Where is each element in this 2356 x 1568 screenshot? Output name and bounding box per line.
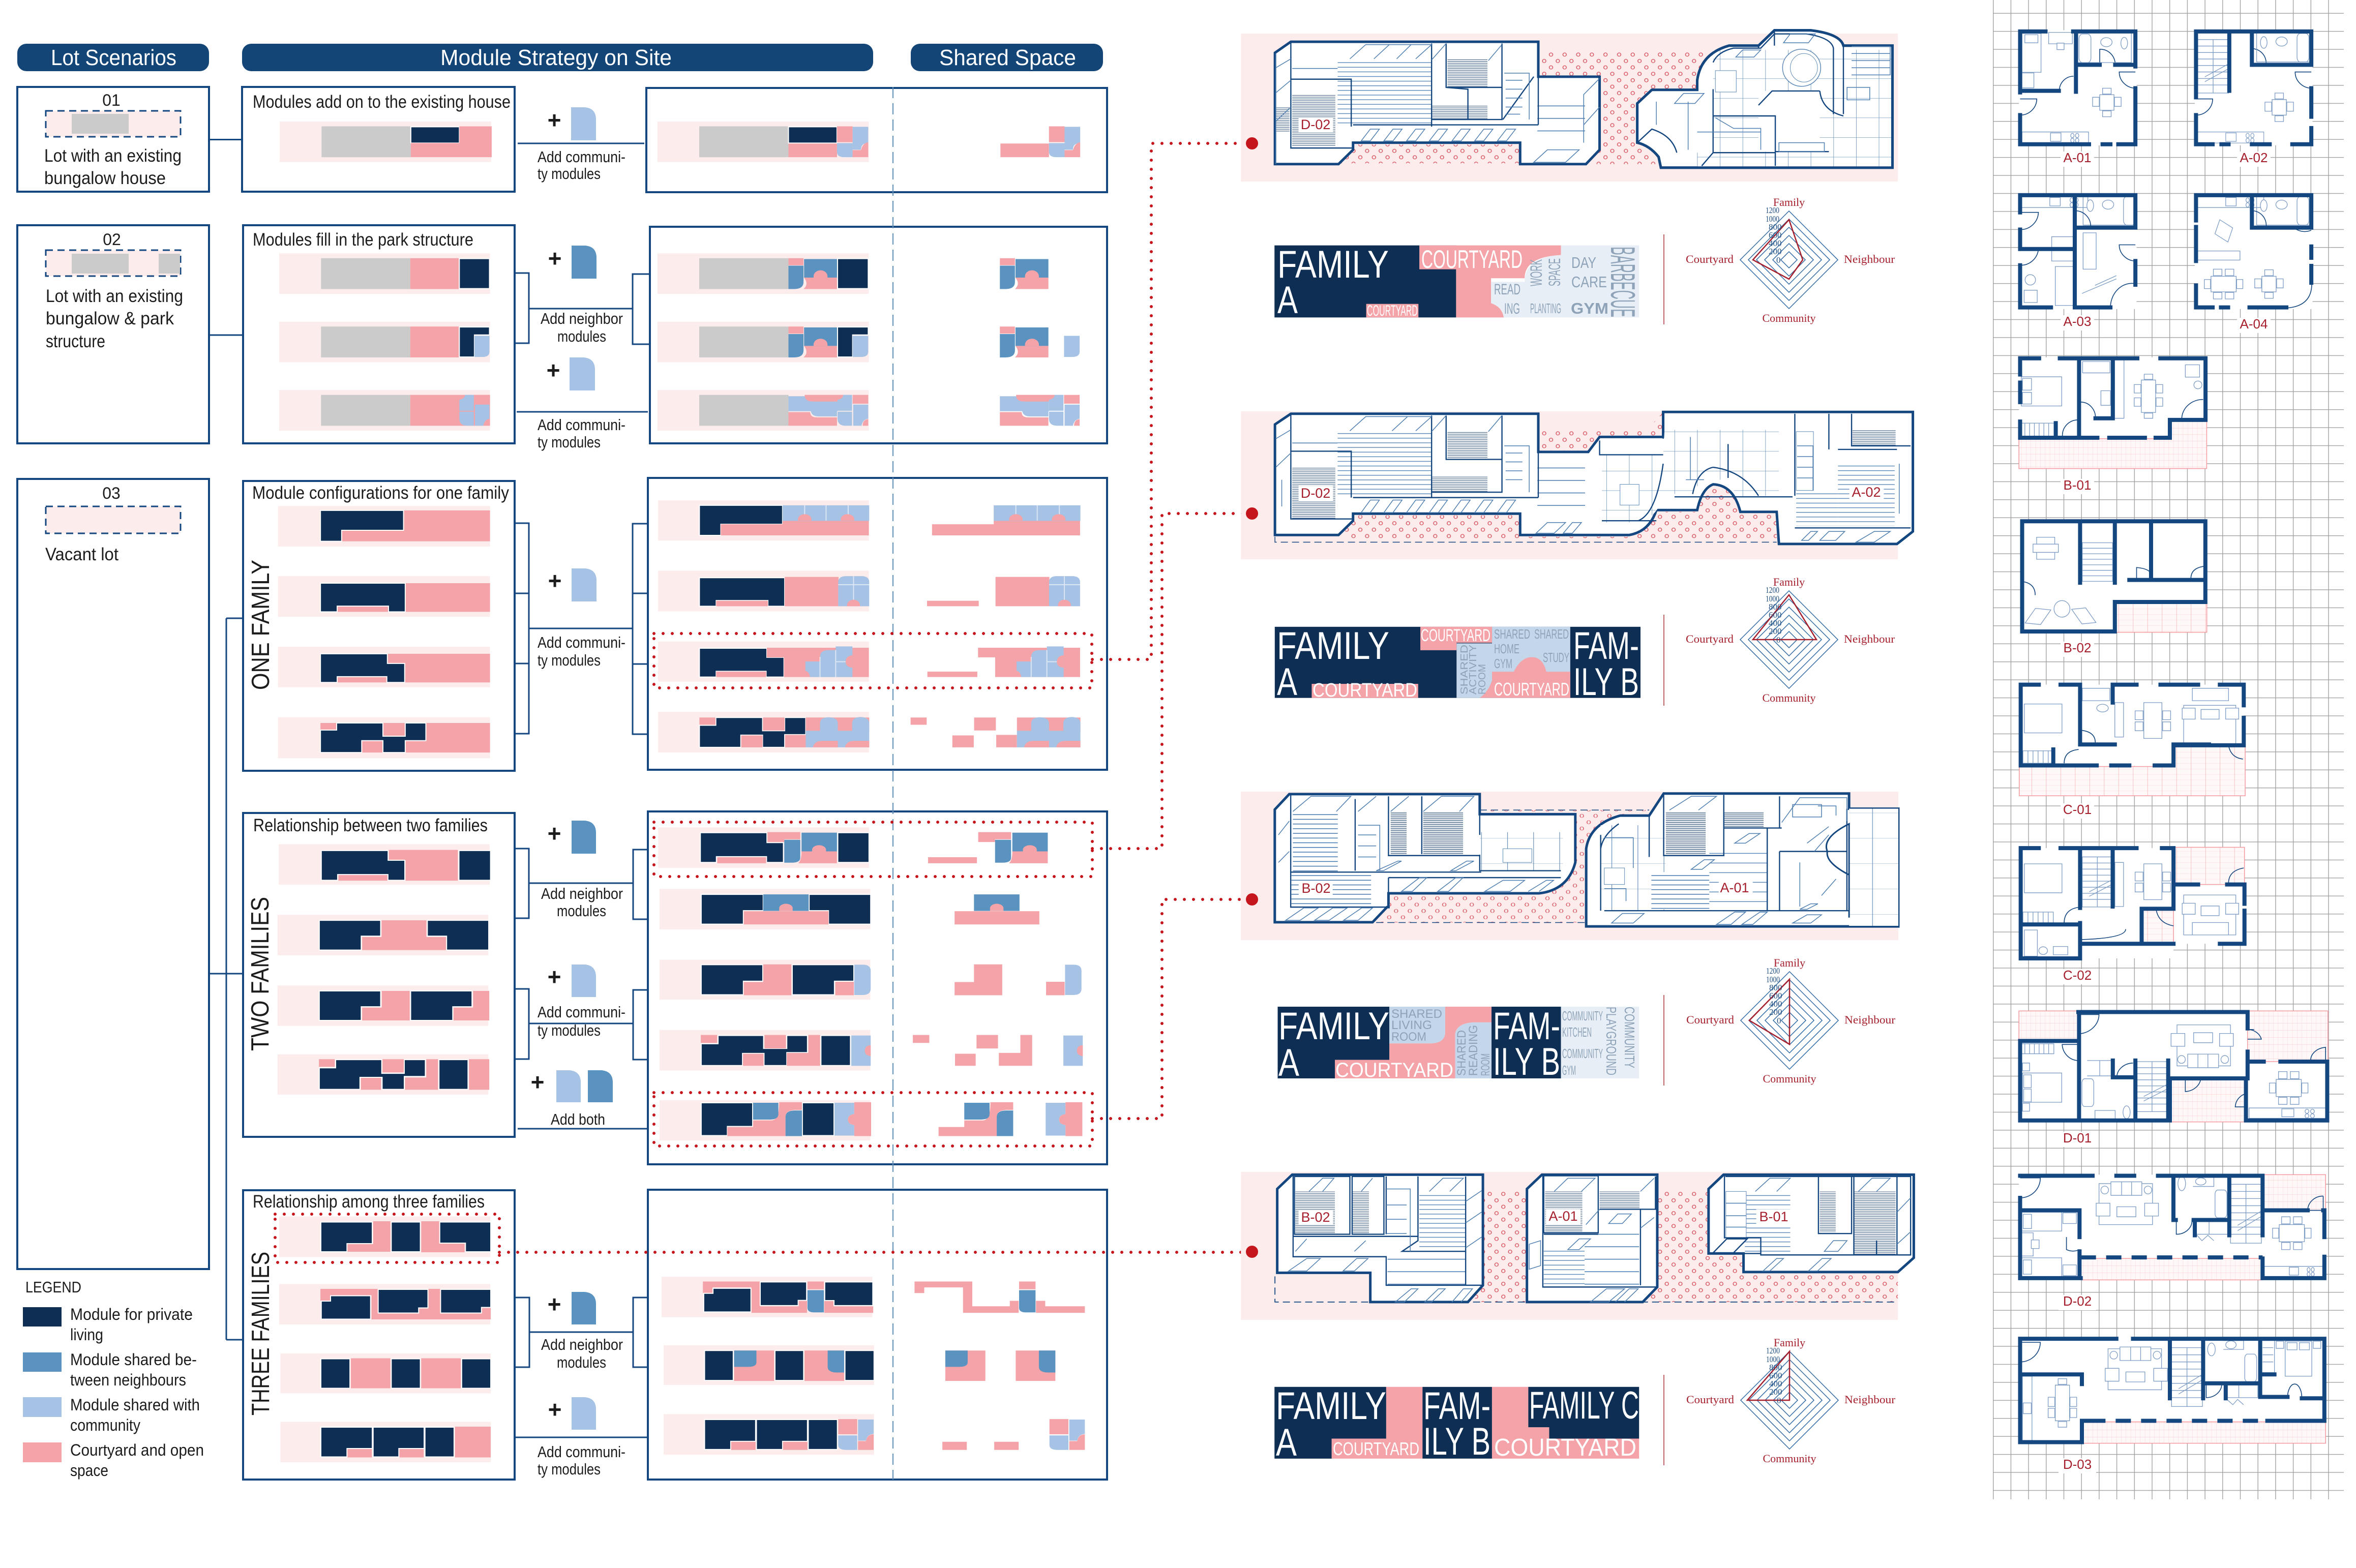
module building B-02: [1275, 794, 1575, 922]
radar chart 1: 400: [1769, 238, 1782, 248]
text: B-02: [1301, 881, 1331, 896]
legend: private module: Module for private: [70, 1305, 193, 1323]
three families add community: [515, 1396, 648, 1478]
program block 2: GYM: [1494, 656, 1512, 671]
radar chart 2: 1200: [1766, 585, 1779, 595]
legend: neighbour module: Module shared be-: [70, 1350, 197, 1369]
lot scenario 03: 03: [102, 484, 121, 502]
program block 1: COURTYARD: [1367, 303, 1418, 319]
module 02 add community: Add communi-: [538, 416, 625, 434]
legend: community module: Module shared with: [70, 1396, 200, 1414]
row 4: [278, 1054, 489, 1095]
panel headings: Modules fill in the park structure: [253, 230, 473, 250]
radar chart 1: Family: [1773, 196, 1805, 208]
radar chart 3: Neighbour: [1844, 1013, 1896, 1026]
module 01 add community: Add communi-: [538, 148, 625, 166]
text: BARBECUE: [1603, 247, 1642, 317]
site marker 3: [1246, 893, 1258, 906]
courtyard dots: [1376, 810, 1649, 922]
program block 2: SHARED: [1494, 626, 1530, 642]
axonometric band 1: [1241, 31, 1898, 182]
lot scenario 01: 01: [102, 91, 121, 109]
axonometric band 2: [1241, 411, 1913, 559]
lot scenario 03: Vacant lot: [45, 545, 118, 564]
lot scenario 02: bungalow & park: [46, 309, 174, 328]
program block 4: FAMILY C: [1529, 1384, 1639, 1427]
lot scenario 01: Lot with an existing: [44, 146, 182, 166]
program block 2: FAMILY: [1277, 624, 1389, 668]
program block 3: READING: [1467, 1025, 1480, 1076]
legend: courtyard: [23, 1441, 204, 1480]
radar chart 2: Courtyard: [1686, 632, 1734, 645]
module 02 add neighbor: +: [548, 245, 561, 272]
axonometric band 3: [1241, 792, 1898, 940]
program block 2: COURTYARD: [1313, 680, 1417, 701]
plan B-02: [2021, 521, 2207, 632]
row 2: [658, 570, 1080, 612]
radar chart 4: 0: [1777, 1396, 1781, 1405]
three families add neighbor: Add neighbor: [541, 1336, 623, 1353]
diagrams: module 01 and 02 and one family, left and results: [278, 122, 1080, 758]
radar chart 1: 1000: [1766, 214, 1779, 224]
radar chart 1: Courtyard: [1686, 253, 1734, 265]
shared space header: [911, 44, 1103, 71]
radar chart 4: 200: [1769, 1387, 1782, 1397]
program block 3: COMMUNITY: [1562, 1046, 1603, 1061]
row 3: [660, 960, 1082, 1000]
program block 4: FAM-: [1423, 1384, 1490, 1428]
module 01 existing: [280, 122, 492, 162]
module building right: [1637, 31, 1892, 168]
radar chart 2: [1664, 576, 1895, 706]
legend: LEGEND: [25, 1278, 81, 1296]
text: B-01: [1759, 1209, 1788, 1224]
radar chart 4: Neighbour: [1844, 1393, 1896, 1406]
program block 4: [1274, 1384, 1639, 1464]
two families add neighbor: +: [548, 820, 561, 847]
dotted leader to axonometric 4: [499, 1251, 1246, 1254]
radar chart 3: 1000: [1766, 975, 1780, 984]
module 01 add community: ty modules: [538, 165, 601, 183]
program block 3: SHARED: [1391, 1007, 1442, 1021]
program block 3: FAM-: [1493, 1005, 1560, 1048]
text: A-01: [1720, 880, 1749, 895]
module 02 add community: [517, 357, 648, 451]
plan labels upper: A-02: [2240, 150, 2268, 165]
rotated family labels: [247, 560, 275, 1415]
program block 3: COMMUNITY: [1562, 1008, 1603, 1023]
rotated family labels: TWO FAMILIES: [247, 897, 274, 1051]
text: D-02: [1301, 486, 1330, 501]
module B-02: [1277, 1174, 1483, 1302]
row 4: [658, 712, 1081, 752]
radar chart 2: Family: [1773, 576, 1805, 588]
courtyard dots: [1341, 52, 1715, 164]
panel headings: Module configurations for one family: [252, 483, 509, 503]
plan C-02: [2021, 847, 2245, 958]
program block 2: STUDY: [1543, 650, 1569, 665]
courtyard dots: [1475, 1191, 1898, 1302]
legend: courtyard: space: [70, 1461, 108, 1480]
program block 1: A: [1277, 279, 1298, 322]
three families add community: +: [548, 1396, 561, 1423]
lot scenarios header: Lot Scenarios: [51, 45, 176, 70]
radar chart 4: [1664, 1336, 1896, 1465]
text: A-01: [1548, 1209, 1578, 1224]
plan B-01: [2019, 357, 2206, 469]
program block 1: [1274, 243, 1642, 322]
program block 4: FAMILY: [1276, 1384, 1386, 1428]
plan labels upper: A-01: [2064, 150, 2091, 165]
program block 2: HOME: [1494, 641, 1519, 656]
radar chart 1: 600: [1769, 230, 1782, 240]
radar chart 4: Community: [1763, 1452, 1816, 1465]
radar chart 1: [1664, 196, 1895, 324]
module 02 add community: ty modules: [538, 433, 601, 451]
radar chart 4: 1200: [1766, 1346, 1780, 1355]
radar chart 2: 0: [1776, 635, 1781, 645]
row 4: [660, 1030, 1083, 1071]
legend: neighbour module: tween neighbours: [70, 1371, 186, 1389]
program block 1: PLANTING: [1530, 300, 1561, 316]
program block 1: WORK: [1527, 259, 1545, 286]
two families add community: +: [548, 963, 561, 990]
radar chart 3: 1200: [1766, 966, 1780, 976]
row 2: [660, 889, 1039, 929]
program block 2: ACTIVITY: [1468, 645, 1479, 695]
one family add community: ty modules: [538, 651, 601, 669]
dashed divider: module strategy vs shared space: [892, 87, 893, 1480]
dotted highlight: two families row 5: [654, 1093, 1092, 1146]
program block 1: SPACE: [1545, 258, 1564, 286]
text: A-02: [1852, 485, 1881, 500]
module 02 add neighbor: [515, 245, 649, 345]
radar chart 3: 400: [1769, 999, 1782, 1009]
three families add community: Add communi-: [538, 1443, 625, 1461]
radar chart 3: 800: [1769, 983, 1782, 992]
program block 3: FAMILY: [1278, 1005, 1389, 1048]
row 1: [279, 1216, 491, 1257]
radar chart 4: 800: [1769, 1363, 1782, 1372]
one family add community: Add communi-: [538, 634, 625, 651]
program block 1: FAMILY: [1277, 243, 1389, 286]
program block 3: SHARED: [1455, 1030, 1469, 1076]
rotated family labels: ONE FAMILY: [247, 560, 275, 690]
plan labels upper: A-03: [2064, 314, 2091, 329]
program block 3: PLAYGROUND: [1603, 1007, 1619, 1075]
radar chart 1: Community: [1762, 312, 1816, 324]
program block 3: COMMUNITY: [1622, 1007, 1637, 1068]
program block 2: A: [1277, 660, 1297, 704]
row 3: [664, 1414, 1085, 1455]
program block 3: GYM: [1562, 1063, 1576, 1078]
radar chart 2: 1000: [1766, 594, 1779, 604]
radar chart 4: 400: [1769, 1379, 1782, 1389]
site marker 4: [1246, 1246, 1258, 1258]
plan D-02: [2019, 1174, 2325, 1280]
dotted highlight: two families row 1: [654, 822, 1092, 877]
radar chart 2: Community: [1762, 691, 1816, 704]
plan labels middle: [2061, 640, 2094, 984]
module strategy header: [242, 44, 873, 71]
program block 3: COURTYARD: [1335, 1059, 1453, 1081]
radar chart 3: 0: [1777, 1016, 1781, 1026]
radar chart 1: 1200: [1766, 205, 1779, 215]
panel headings: [252, 92, 511, 1212]
radar chart 2: 600: [1769, 610, 1782, 620]
plan labels upper: [2061, 150, 2271, 494]
row 2: [664, 1345, 1055, 1385]
two families add community: Add communi-: [538, 1003, 625, 1021]
three families add neighbor: modules: [557, 1353, 606, 1371]
radar chart 3: Family: [1774, 956, 1805, 969]
three families left rows: [279, 1216, 491, 1462]
label D-02: [1299, 118, 1333, 133]
plan labels upper: A-04: [2240, 316, 2268, 331]
panel headings: Relationship between two families: [253, 816, 488, 835]
program block 2: FAM-: [1573, 624, 1639, 668]
module 02 left rows: [279, 253, 490, 431]
program block 3: ROOM: [1479, 1053, 1493, 1076]
plan A-01: [2019, 30, 2137, 145]
lot scenario 02: 02: [103, 230, 121, 249]
radar chart 3: 200: [1769, 1007, 1782, 1017]
lot scenario 02: [17, 225, 209, 443]
radar chart 4: 1000: [1766, 1354, 1780, 1364]
two families add community: ty modules: [538, 1021, 601, 1039]
two families add neighbor: Add neighbor: [541, 885, 623, 902]
radar chart 4: Family: [1774, 1336, 1805, 1349]
program block 3: ILY B: [1493, 1040, 1560, 1083]
program block 1: COURTYARD: [1421, 245, 1523, 274]
plan labels lower: [2059, 1130, 2096, 1473]
axonometric band 4: [1241, 1172, 1914, 1320]
module strategy header: Module Strategy on Site: [440, 45, 672, 70]
legend: private module: living: [70, 1325, 103, 1344]
rotated family labels: THREE FAMILIES: [247, 1252, 275, 1415]
program block 3: [1278, 1005, 1639, 1084]
site marker 1: [1246, 137, 1258, 149]
program block 4: A: [1276, 1421, 1297, 1464]
plan C-01: [2019, 685, 2245, 796]
program block 3: LIVING: [1391, 1018, 1432, 1032]
dotted highlight: one family row 3: [654, 634, 1092, 688]
lot scenario 03: [17, 479, 209, 1269]
module building left: [1275, 42, 1600, 164]
two families add both: Add both: [551, 1110, 605, 1128]
row 1: [279, 844, 491, 885]
courtyard dots: [1341, 412, 1777, 540]
module 01 add community: [518, 107, 644, 183]
program block 1: DAY: [1571, 254, 1596, 272]
plan labels middle: B-02: [2064, 640, 2091, 655]
program block 4: ILY B: [1423, 1420, 1490, 1463]
program block 1: GYM: [1571, 299, 1608, 317]
legend: neighbour module: [23, 1350, 197, 1389]
legend: community module: [23, 1396, 200, 1434]
plan D-01: [2019, 1011, 2328, 1122]
program block 4: COURTYARD: [1494, 1434, 1636, 1461]
program block 2: ROOM: [1477, 664, 1488, 695]
radar chart 4: 600: [1769, 1371, 1782, 1380]
module 02 add neighbor: modules: [557, 327, 606, 345]
program block 1: ING: [1504, 300, 1520, 317]
dotted leader to axonometric 3: [1092, 899, 1246, 1119]
radar chart 2: 800: [1769, 602, 1782, 612]
module A-01: [1527, 1174, 1657, 1302]
two families add community: [515, 963, 648, 1060]
label backgrounds: [1299, 1209, 1791, 1225]
program block 3: KITCHEN: [1562, 1024, 1592, 1040]
two families add neighbor: modules: [557, 902, 606, 920]
site marker 2: [1246, 507, 1258, 520]
module 01 add community: +: [548, 107, 561, 133]
lot scenario 02: structure: [46, 331, 105, 351]
panel headings: Modules add on to the existing house: [253, 92, 511, 112]
floor plan grid: [1993, 0, 2344, 1499]
panel headings: Relationship among three families: [253, 1192, 485, 1212]
lot scenario 02: Lot with an existing: [46, 286, 183, 306]
one family add community: [515, 523, 648, 734]
plan labels lower: D-03: [2063, 1457, 2092, 1472]
radar chart 2: 200: [1769, 626, 1782, 636]
legend: courtyard: Courtyard and open: [70, 1441, 204, 1459]
program block 2: SHARED: [1459, 645, 1470, 695]
plan A-02: [2195, 30, 2312, 145]
plan labels lower: D-02: [2063, 1293, 2092, 1309]
row 1: [658, 827, 1048, 868]
module panel frames: [242, 87, 1107, 1480]
text: B-02: [1301, 1210, 1330, 1225]
lot scenarios header: [17, 44, 209, 71]
plan labels middle: C-02: [2063, 968, 2092, 983]
legend: community module: community: [70, 1416, 140, 1434]
legend: [23, 1278, 204, 1480]
lot scenario 01: bungalow house: [44, 168, 166, 188]
radar chart 4: Courtyard: [1686, 1393, 1734, 1406]
program block 2: [1275, 624, 1641, 704]
three families add community: ty modules: [538, 1460, 601, 1478]
dotted leader to axonometric 1: [1092, 143, 1246, 659]
floor plans upper group: [2019, 30, 2312, 469]
one family results: [658, 500, 1081, 752]
lot scenario 01: [17, 87, 209, 192]
program block 3: ROOM: [1391, 1030, 1426, 1044]
two families left rows: [278, 844, 491, 1095]
plan A-04: [2195, 194, 2312, 309]
radar chart 1: 800: [1769, 222, 1782, 232]
two families results: [658, 827, 1083, 1140]
program block 2: ILY B: [1573, 660, 1639, 704]
program block 4: COURTYARD: [1333, 1438, 1419, 1459]
module 02 results: [658, 253, 1080, 431]
program block 2: SHARED: [1534, 626, 1569, 642]
radar chart 2: 400: [1769, 618, 1782, 628]
dotted highlight: three families row 1: [275, 1214, 499, 1262]
one family add community: +: [548, 567, 561, 594]
radar chart 1: 200: [1769, 247, 1782, 256]
legend: private module: [23, 1305, 193, 1344]
text: D-02: [1301, 117, 1330, 132]
floor plans middle group: [2019, 521, 2245, 958]
one family left rows: [278, 506, 490, 758]
plan labels lower: D-01: [2063, 1130, 2092, 1145]
program block 1: READ: [1494, 281, 1520, 298]
plan labels middle: C-01: [2063, 802, 2092, 817]
radar chart 1: Neighbour: [1844, 253, 1895, 265]
dotted leader to axonometric 2: [1092, 514, 1246, 849]
module 01 result: [658, 122, 1080, 162]
row 3: [658, 642, 1080, 682]
program block 1: CARE: [1571, 273, 1607, 291]
row 2: [279, 1284, 491, 1324]
label backgrounds: [1299, 881, 1753, 895]
three families add neighbor: [515, 1291, 648, 1371]
labels: [1299, 485, 1884, 501]
connectors: [209, 139, 243, 1340]
program block 2: COURTYARD: [1494, 679, 1569, 700]
module building: [1275, 412, 1913, 544]
two families add both: +: [531, 1069, 544, 1095]
plan A-03: [2019, 194, 2137, 309]
module B-01: [1709, 1174, 1914, 1272]
row 1: [658, 500, 1081, 540]
row 5: [660, 1100, 1082, 1140]
program block 3: A: [1278, 1041, 1299, 1084]
row 3: [278, 985, 489, 1026]
two families add both: [518, 1069, 648, 1129]
row 4: [280, 1422, 491, 1462]
plan D-03: [2019, 1338, 2325, 1443]
row 2: [278, 915, 489, 955]
floor plans lower group: [2019, 1011, 2328, 1443]
row 1: [662, 1277, 1085, 1317]
program block 2: COURTYARD: [1421, 626, 1490, 645]
radar chart 3: [1664, 956, 1896, 1085]
radar chart 3: Community: [1763, 1072, 1816, 1085]
radar chart 1: 0: [1776, 255, 1781, 265]
radar chart 3: 600: [1769, 991, 1782, 1001]
two families add neighbor: [515, 820, 648, 920]
three families add neighbor: +: [548, 1291, 561, 1317]
radar chart 2: Neighbour: [1844, 632, 1895, 645]
row 3: [280, 1353, 491, 1393]
shared space header: Shared Space: [939, 45, 1076, 70]
three families results: [662, 1277, 1085, 1455]
module 02 add neighbor: Add neighbor: [541, 310, 623, 327]
plan labels upper: B-01: [2064, 477, 2091, 493]
module building A-01: [1586, 794, 1898, 926]
radar chart 3: Courtyard: [1686, 1013, 1734, 1026]
module 02 add community: +: [547, 357, 560, 383]
